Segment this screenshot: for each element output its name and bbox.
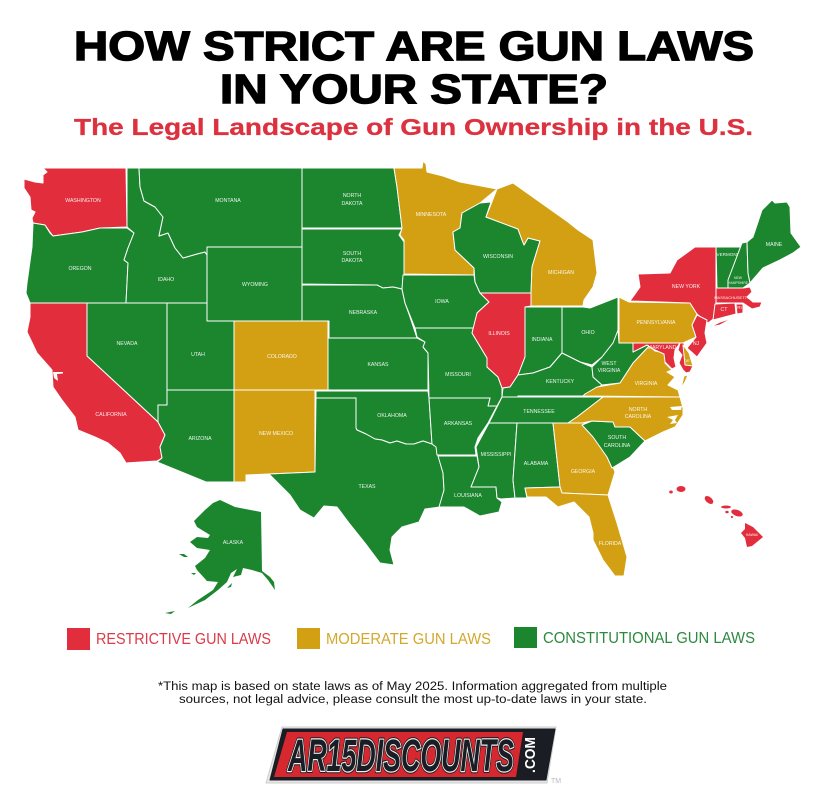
legend item: restrictive: RESTRICTIVE GUN LAWS xyxy=(96,631,271,648)
state: Utah: UTAH xyxy=(191,352,205,358)
state: Delaware: DE xyxy=(684,358,690,363)
state: South Dakota xyxy=(302,229,404,289)
logo: AR15DISCOUNTS.COM xyxy=(266,727,561,785)
state: Nevada xyxy=(87,303,167,422)
state: South Carolina xyxy=(582,421,645,468)
logo: AR15DISCOUNTS.COM: AR15DISCOUNTS xyxy=(287,730,514,781)
state: West Virginia: WEST xyxy=(602,361,617,367)
state: Georgia xyxy=(553,423,615,495)
legend xyxy=(67,627,755,650)
state: Washington: WASHINGTON xyxy=(65,198,101,204)
state: Illinois: ILLINOIS xyxy=(488,331,510,337)
state: Vermont xyxy=(716,247,741,289)
state: Maine xyxy=(747,200,801,283)
state: New Mexico: NEW MEXICO xyxy=(259,431,293,437)
footnote: *This map is based on state laws as of May 2025. Information aggregated from multiple xyxy=(158,681,667,693)
state: New Hampshire: NEW xyxy=(734,276,743,280)
state: North Dakota xyxy=(302,168,402,228)
state: New Jersey xyxy=(687,315,707,357)
state: Minnesota: MINNESOTA xyxy=(416,212,447,218)
state: New Hampshire xyxy=(728,242,750,289)
legend item: moderate: MODERATE GUN LAWS xyxy=(326,631,491,648)
state: California: CALIFORNIA xyxy=(95,412,127,418)
state: Massachusetts: MASSACHUSETTS xyxy=(714,295,750,300)
state: Oregon: OREGON xyxy=(68,266,92,272)
state: Idaho xyxy=(124,168,207,303)
state: Maryland xyxy=(633,343,693,373)
state: Alaska xyxy=(165,500,275,614)
footnote xyxy=(158,681,667,706)
state: Minnesota xyxy=(394,161,497,275)
state: Ohio xyxy=(562,297,618,365)
title: HOW STRICT ARE GUN LAWS xyxy=(74,23,754,69)
state: Massachusetts xyxy=(714,287,762,309)
state: Tennessee: TENNESSEE xyxy=(523,409,555,415)
state: Nebraska xyxy=(302,285,417,338)
state: New Mexico xyxy=(234,390,315,482)
state: Illinois xyxy=(472,293,531,388)
map of US states xyxy=(24,161,801,614)
state: Kentucky: KENTUCKY xyxy=(546,379,575,385)
state: Kansas xyxy=(328,338,428,390)
state: Montana: MONTANA xyxy=(215,198,241,204)
state: Ohio: OHIO xyxy=(581,330,595,336)
state: South Dakota: DAKOTA xyxy=(342,258,363,264)
state: Arizona xyxy=(157,390,234,482)
state: Utah xyxy=(167,303,234,390)
state: New Jersey: NJ xyxy=(693,341,700,347)
state: Hawaii xyxy=(669,486,763,547)
state: Kentucky xyxy=(502,353,602,398)
state: Oklahoma xyxy=(316,391,432,444)
state: North Carolina: NORTH xyxy=(629,407,647,413)
state: Louisiana xyxy=(438,456,502,516)
legend item: constitutional: CONSTITUTIONAL GUN LAWS xyxy=(543,630,755,647)
state: North Carolina: CAROLINA xyxy=(625,414,652,420)
state: Louisiana: LOUISIANA xyxy=(454,493,482,499)
state: Arizona: ARIZONA xyxy=(188,436,212,442)
state: Tennessee xyxy=(489,397,603,423)
state: Michigan xyxy=(486,183,597,306)
state: Nebraska: NEBRASKA xyxy=(349,310,378,316)
state: Texas: TEXAS xyxy=(358,484,376,490)
state: West Virginia xyxy=(592,330,657,385)
state: Florida: FLORIDA xyxy=(599,541,622,547)
state: Texas xyxy=(269,398,444,565)
state: South Dakota: SOUTH xyxy=(343,251,361,257)
state: Montana xyxy=(139,168,302,258)
state: Iowa xyxy=(402,275,489,328)
state: Rhode Island: RI xyxy=(737,305,742,310)
state: Connecticut: CT xyxy=(721,307,728,313)
state: Wyoming: WYOMING xyxy=(242,282,268,288)
state: Alabama: ALABAMA xyxy=(524,461,549,467)
footnote: sources, not legal advice, please consult the most up-to-date laws in your state. xyxy=(179,694,647,706)
state: Wisconsin xyxy=(453,202,540,293)
state: Missouri xyxy=(415,328,502,406)
state: Washington xyxy=(24,168,127,236)
state: California xyxy=(27,303,165,463)
state: North Dakota: NORTH xyxy=(343,193,361,199)
state: Oklahoma: OKLAHOMA xyxy=(377,413,407,419)
subtitle: The Legal Landscape of Gun Ownership in the U.S. xyxy=(74,114,753,140)
state: New York xyxy=(630,247,733,327)
state: Colorado xyxy=(234,321,328,390)
state: Delaware xyxy=(683,345,693,366)
state: Maine: MAINE xyxy=(766,242,783,248)
logo: AR15DISCOUNTS.COM: TM xyxy=(551,778,561,785)
legend item: restrictive xyxy=(67,628,271,650)
state: Wyoming xyxy=(207,247,302,321)
state: Vermont: VERMONT xyxy=(717,252,740,257)
state: Arkansas: ARKANSAS xyxy=(444,421,473,427)
state: Mississippi xyxy=(471,423,517,499)
state: Missouri: MISSOURI xyxy=(445,372,471,378)
state: Georgia: GEORGIA xyxy=(571,469,596,475)
logo: AR15DISCOUNTS.COM: .COM xyxy=(522,737,539,773)
state: Iowa: IOWA xyxy=(435,299,449,305)
state: North Carolina xyxy=(568,397,683,441)
state: Alaska: ALASKA xyxy=(223,540,244,546)
title: IN YOUR STATE? xyxy=(220,66,608,112)
state: Michigan: MICHIGAN xyxy=(548,270,574,276)
state: Virginia xyxy=(583,346,688,397)
state: Indiana xyxy=(518,307,562,375)
state: New York: NEW YORK xyxy=(672,284,701,290)
state: Alabama xyxy=(513,423,560,498)
state: Florida xyxy=(525,487,627,576)
state: North Dakota: DAKOTA xyxy=(342,201,363,207)
state: Indiana: INDIANA xyxy=(531,337,553,343)
state: Kansas: KANSAS xyxy=(367,362,389,368)
state: Rhode Island xyxy=(736,304,743,314)
legend item: constitutional xyxy=(514,627,755,648)
state: Wisconsin: WISCONSIN xyxy=(483,254,513,260)
state: Pennsylvania xyxy=(619,297,697,343)
state: South Carolina: CAROLINA xyxy=(604,443,631,449)
logo: AR15DISCOUNTS.COM: AR15DISCOUNTS xyxy=(287,730,514,781)
state: Connecticut xyxy=(713,303,736,320)
state: West Virginia: VIRGINIA xyxy=(598,368,621,374)
state: Oregon xyxy=(26,223,134,303)
state: Maryland: MARYLAND xyxy=(648,345,677,351)
state: Hawaii: HAWAII xyxy=(746,533,758,537)
state: South Carolina: SOUTH xyxy=(608,435,626,441)
legend item: moderate xyxy=(297,628,491,649)
state: Nevada: NEVADA xyxy=(117,341,138,347)
state: Arkansas xyxy=(429,398,497,455)
state: Idaho: IDAHO xyxy=(158,277,174,283)
state: Colorado: COLORADO xyxy=(267,354,297,360)
state: Mississippi: MISSISSIPPI xyxy=(481,452,511,458)
state: Virginia: VIRGINIA xyxy=(635,381,658,387)
state: Pennsylvania: PENNSYLVANIA xyxy=(636,320,676,326)
title xyxy=(74,23,754,112)
state: New Hampshire: HAMPSHIRE xyxy=(728,281,749,285)
